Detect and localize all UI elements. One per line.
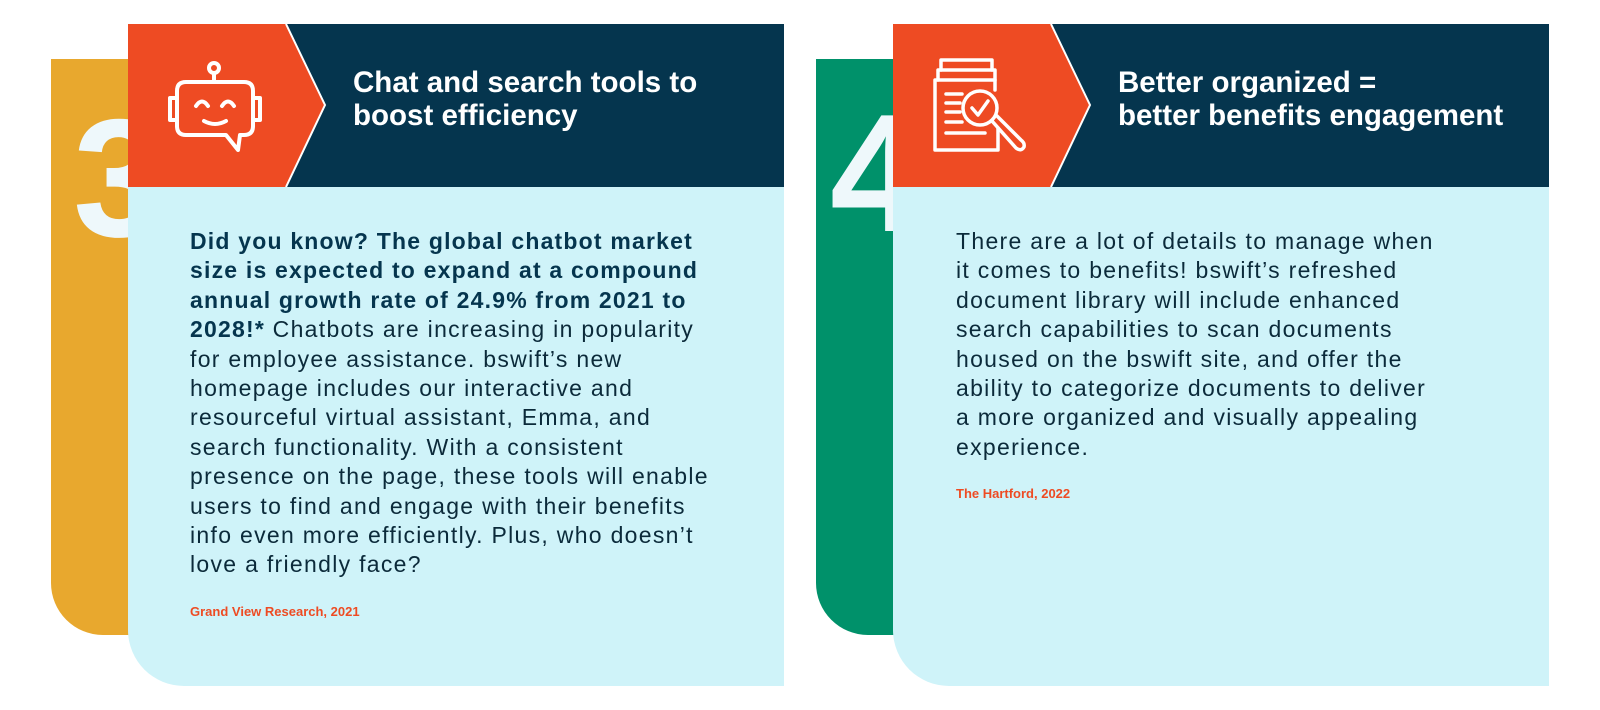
text block	[190, 228, 709, 577]
text block: search capabilities to scan documents	[956, 316, 1393, 342]
heading	[1118, 66, 1503, 132]
text block: search functionality. With a consistent	[190, 434, 624, 460]
text block: annual growth rate of 24.9% from 2021 to	[190, 287, 687, 313]
text block: it comes to benefits! bswift’s refreshed	[956, 257, 1397, 283]
text block: users to find and engage with their benefits	[190, 493, 686, 519]
text block: resourceful virtual assistant, Emma, and	[190, 404, 651, 430]
tab: number 3: 3	[73, 84, 166, 272]
text block: There are a lot of details to manage when	[956, 228, 1434, 254]
text block: document library will include enhanced	[956, 287, 1400, 313]
text block: a more organized and visually appealing	[956, 404, 1418, 430]
text block: Did you know? The global chatbot market	[190, 228, 693, 254]
icon: robot	[170, 63, 260, 150]
heading	[353, 66, 697, 132]
header	[128, 24, 784, 187]
text block: presence on the page, these tools will enable	[190, 463, 709, 489]
text block: love a friendly face?	[190, 551, 422, 577]
text block: experience.	[956, 434, 1089, 460]
header	[893, 24, 1549, 187]
text block	[956, 228, 1434, 460]
tab: number 3	[51, 59, 171, 635]
icon block with arrow	[893, 24, 1092, 187]
text block: housed on the bswift site, and offer the	[956, 346, 1403, 372]
heading: boost efficiency	[353, 99, 578, 132]
text block: ability to categorize documents to deliver	[956, 375, 1426, 401]
text block: info even more efficiently. Plus, who doesn’t	[190, 522, 694, 548]
heading: Better organized =	[1118, 66, 1376, 99]
text block: 2028!* Chatbots are increasing in popularity	[190, 316, 694, 342]
icon: document search	[935, 60, 1024, 150]
icon block with arrow	[128, 24, 326, 187]
source: The Hartford, 2022	[956, 486, 1070, 501]
text block: homepage includes our interactive and	[190, 375, 633, 401]
tab: number 4	[816, 59, 936, 635]
heading: Chat and search tools to	[353, 66, 697, 99]
heading: better benefits engagement	[1118, 99, 1503, 132]
panel: better organized	[893, 24, 1549, 686]
panel: chat and search	[128, 24, 784, 686]
source: Grand View Research, 2021	[190, 604, 360, 619]
tab: number 4: 4	[830, 79, 923, 267]
text block: for employee assistance. bswift’s new	[190, 346, 622, 372]
text block: size is expected to expand at a compound	[190, 257, 698, 283]
